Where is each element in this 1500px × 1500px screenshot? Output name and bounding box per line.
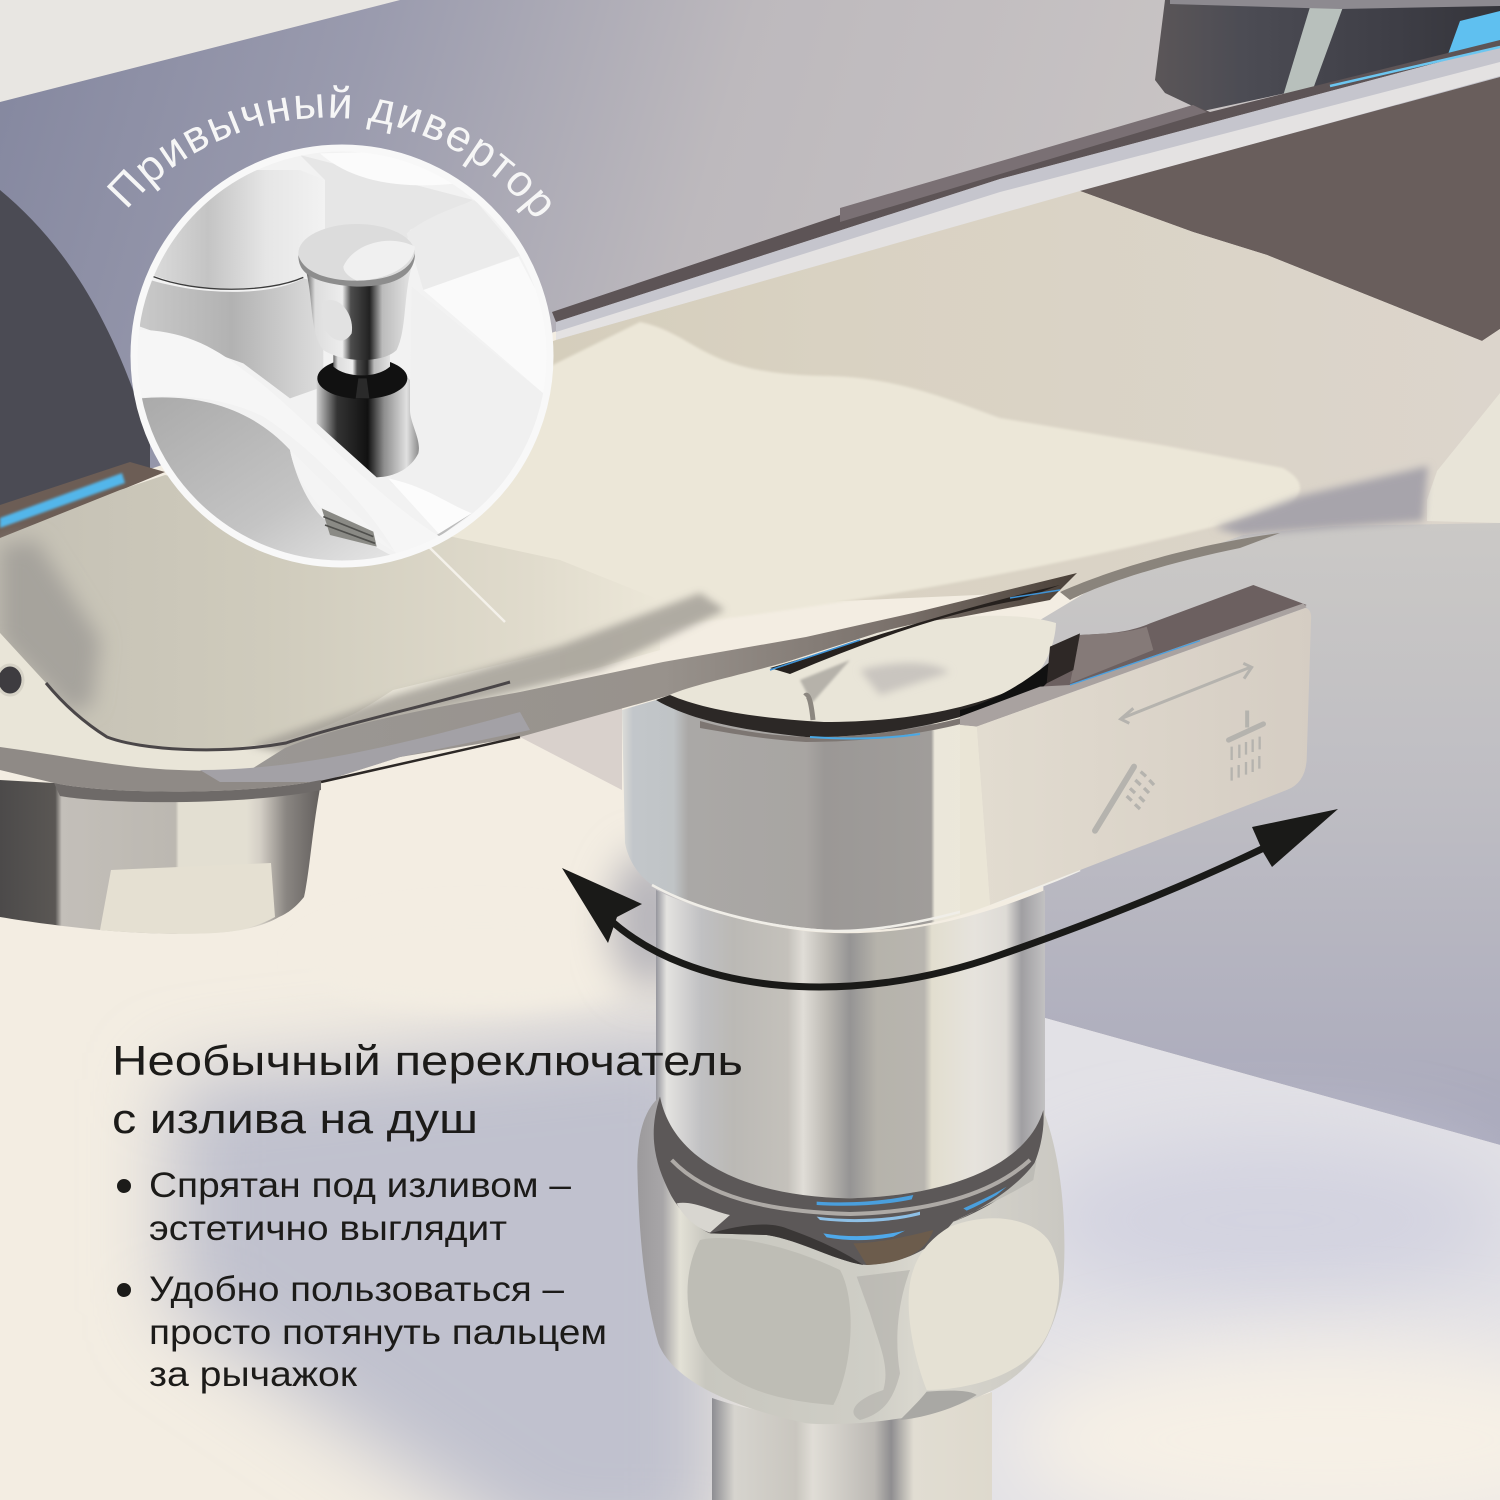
bullet two — [117, 1270, 607, 1394]
vertical cream strip — [960, 725, 990, 915]
center ridge — [853, 1270, 910, 1420]
dark ring — [656, 655, 1080, 737]
left lower chrome piece — [0, 780, 321, 934]
diverter cap — [307, 267, 412, 360]
spout left dark side — [0, 190, 150, 510]
bullet one: Спрятан под изливом – — [149, 1166, 572, 1205]
bullet one — [117, 1166, 572, 1248]
right wall — [1040, 521, 1500, 1145]
top-left light wall corner — [0, 0, 400, 102]
gray bowl — [142, 397, 390, 560]
bullet two: Удобно пользоваться – — [149, 1270, 565, 1309]
heading: с излива на душ — [112, 1095, 478, 1142]
wedge behind spout — [520, 700, 622, 790]
inset white ring — [131, 145, 553, 567]
bullet one: эстетично выглядит — [149, 1209, 507, 1248]
lower pipe — [712, 1392, 992, 1500]
upper spout chrome edge — [552, 40, 1500, 340]
gray shadow — [250, 593, 725, 757]
middle cylinder — [652, 870, 1080, 1240]
spout tan top — [160, 191, 1500, 610]
bullet two: просто потянуть пальцем — [149, 1313, 607, 1352]
inset photo: habitual diverter — [130, 144, 554, 568]
right facet — [909, 1218, 1059, 1390]
stem — [333, 354, 390, 376]
bullet two: за рычажок — [149, 1355, 358, 1394]
threaded nipple — [322, 508, 377, 547]
ledge surface — [990, 1018, 1500, 1500]
two-way black arrow — [562, 809, 1338, 987]
cream underside — [0, 633, 560, 792]
lilac shadow at spout end — [1215, 466, 1428, 535]
floor shadows — [170, 850, 1500, 1500]
metal below seam — [140, 277, 323, 398]
icon: shower head — [1229, 711, 1263, 781]
cap slot — [338, 302, 352, 340]
lever top side — [960, 585, 1307, 725]
heading — [112, 1037, 743, 1142]
curved white rim — [150, 330, 439, 539]
upper wall — [0, 0, 1500, 520]
heading: Необычный переключатель — [112, 1037, 743, 1084]
ring — [654, 1097, 1044, 1265]
top-right handle — [1155, 0, 1500, 111]
lever with icons — [960, 585, 1311, 915]
lower chrome cup — [316, 378, 419, 478]
nut — [637, 1097, 1064, 1424]
right cream facet — [1427, 393, 1500, 523]
right plate — [390, 287, 543, 513]
textured edge — [46, 682, 510, 750]
chrome streak at spout end — [1060, 533, 1280, 600]
white streak — [427, 545, 505, 622]
white tube — [290, 450, 292, 460]
brown reflection — [1080, 77, 1500, 341]
left metal — [154, 170, 286, 288]
inset ring stroke — [134, 148, 550, 564]
lower band — [250, 573, 1077, 782]
side screw — [0, 665, 23, 695]
icon: two-way arrow — [1121, 663, 1252, 723]
callout text block — [112, 1037, 743, 1394]
curved caption: Привычный дивертор — [106, 85, 550, 216]
left facet — [687, 1238, 851, 1405]
dark chrome wisps — [770, 585, 1060, 674]
icon: hand shower — [1095, 767, 1154, 831]
spout cream reflection — [340, 322, 1300, 640]
spout opening above collar — [656, 585, 1080, 742]
lever face — [977, 608, 1311, 905]
spout lower body — [0, 475, 1280, 792]
upper white shapes — [301, 156, 472, 238]
upper collar of the pipe — [622, 690, 990, 930]
